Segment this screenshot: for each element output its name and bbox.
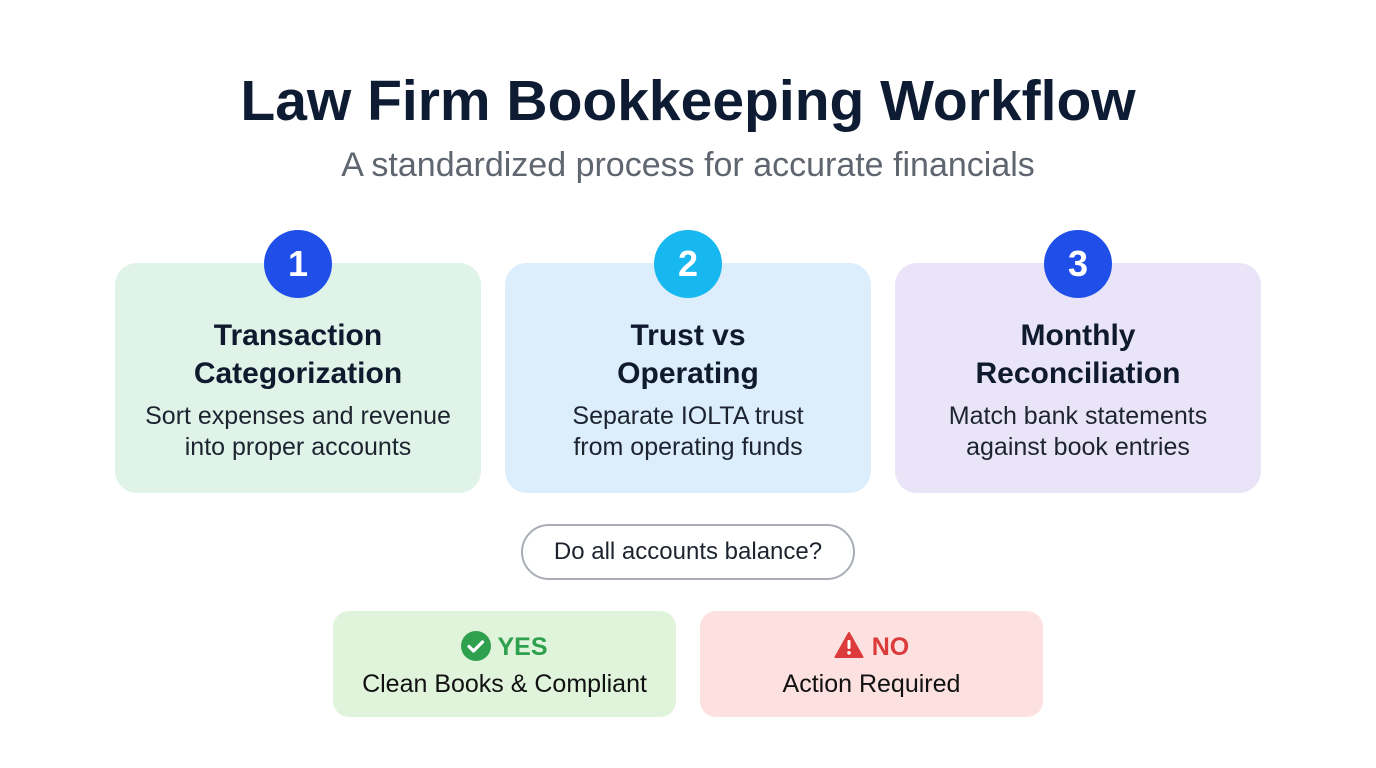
- step 1 heading: Categorization: [194, 357, 402, 390]
- step 3 text: against book entries: [966, 433, 1190, 461]
- outcome: yes: [333, 611, 676, 717]
- decision question: Do all accounts balance?: [554, 538, 822, 565]
- no heading: [834, 632, 909, 661]
- step 3 heading: Monthly: [1020, 319, 1135, 352]
- step 3 text: [949, 402, 1207, 461]
- step 1 text: into proper accounts: [185, 433, 411, 461]
- title: Law Firm Bookkeeping Workflow: [240, 69, 1136, 133]
- step 2 text: Separate IOLTA trust: [572, 402, 804, 430]
- step 1 heading: [194, 319, 402, 390]
- subtitle: A standardized process for accurate financials: [341, 146, 1035, 184]
- yes heading: [461, 631, 548, 661]
- step 2 text: from operating funds: [573, 433, 803, 461]
- badge 2: 2: [678, 243, 698, 284]
- yes text: Clean Books & Compliant: [362, 670, 647, 698]
- step 2 text: [572, 402, 804, 461]
- badge 3: [1044, 230, 1112, 298]
- step 1 text: [145, 402, 451, 461]
- no heading: NO: [872, 633, 909, 661]
- badge 2: [654, 230, 722, 298]
- decision question: [521, 524, 855, 580]
- panel: step 2: [505, 263, 871, 493]
- panel: step 1: [115, 263, 481, 493]
- badge 1: 1: [288, 243, 308, 284]
- no text: Action Required: [783, 670, 960, 698]
- panel: step 3: [895, 263, 1261, 493]
- step 2 heading: [617, 319, 759, 390]
- step 3 heading: [975, 319, 1181, 390]
- step 3 heading: Reconciliation: [975, 357, 1181, 390]
- outcome: no: [700, 611, 1043, 717]
- yes heading: YES: [497, 633, 548, 661]
- step 2 heading: Operating: [617, 357, 759, 390]
- step 2 heading: Trust vs: [630, 319, 746, 352]
- badge 3: 3: [1068, 243, 1088, 284]
- step 3 text: Match bank statements: [949, 402, 1207, 430]
- badge 1: [264, 230, 332, 298]
- step 1 heading: Transaction: [214, 319, 382, 352]
- step 1 text: Sort expenses and revenue: [145, 402, 451, 430]
